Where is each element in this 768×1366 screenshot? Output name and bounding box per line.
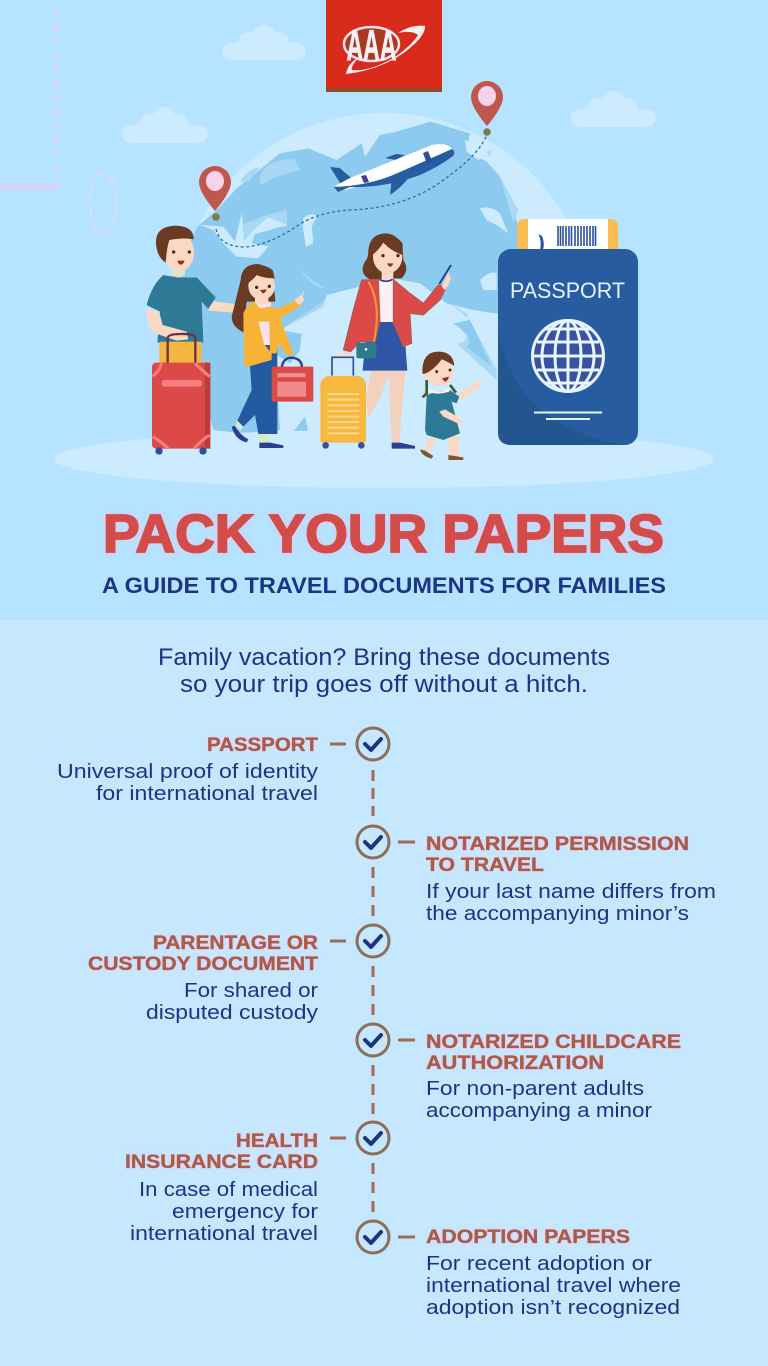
item: passport	[57, 735, 319, 805]
item: parentage or custody document: For shared or	[184, 979, 318, 1002]
icon: flight path	[216, 135, 487, 247]
man	[147, 226, 237, 364]
intro text: so your trip goes off without a hitch.	[180, 671, 588, 698]
title: PACK YOUR PAPERS	[103, 504, 664, 564]
check icons	[357, 728, 389, 1253]
icon: airplane	[330, 144, 454, 195]
item: health insurance card: international travel	[130, 1222, 318, 1245]
icon: left map pin	[199, 166, 231, 221]
intro text	[158, 644, 610, 698]
passport	[498, 249, 638, 445]
icon: cloud left	[122, 107, 208, 143]
item: notarized childcare authorization: For non-parent adults	[426, 1077, 644, 1100]
item: notarized permission to travel: the accompanying minor’s	[426, 902, 689, 925]
item: adoption papers: international travel where	[426, 1274, 681, 1297]
man's red suitcase	[152, 334, 210, 455]
item: health insurance card: In case of medical	[139, 1178, 318, 1201]
family illustration	[147, 226, 482, 460]
item: notarized permission to travel: TO TRAVEL	[426, 855, 544, 876]
yellow suitcase	[320, 357, 366, 449]
item: adoption papers: ADOPTION PAPERS	[426, 1227, 630, 1248]
item: parentage or custody document: disputed custody	[146, 1001, 319, 1024]
item: passport: for international travel	[96, 782, 318, 805]
globe	[180, 113, 566, 434]
passport label: PASSPORT	[510, 278, 625, 303]
item: health insurance card: INSURANCE CARD	[125, 1152, 318, 1173]
item: notarized permission to travel	[426, 834, 716, 925]
item: health insurance card: emergency for	[172, 1200, 318, 1223]
timeline spine	[330, 744, 415, 1237]
AAA logo: AAA	[346, 21, 396, 70]
older girl	[232, 264, 304, 448]
item: health insurance card: HEALTH	[236, 1131, 318, 1152]
item: parentage or custody document: PARENTAGE OR	[153, 933, 318, 954]
ground ellipse	[54, 430, 714, 488]
header background	[0, 0, 768, 620]
item: notarized childcare authorization: accompanying a minor	[426, 1099, 652, 1122]
mother	[337, 233, 451, 449]
item: notarized permission to travel: If your last name differs from	[426, 880, 716, 903]
item: notarized childcare authorization: NOTARIZED CHILDCARE	[426, 1032, 681, 1053]
icon: passport globe	[532, 320, 604, 392]
icon: cloud top centre	[222, 25, 306, 60]
item: adoption papers: For recent adoption or	[426, 1252, 652, 1275]
item: adoption papers	[426, 1227, 681, 1319]
red handbag	[272, 358, 313, 402]
item: parentage or custody document	[88, 933, 319, 1024]
item: passport: PASSPORT	[207, 735, 318, 756]
AAA logo	[326, 0, 442, 92]
icon: right map pin	[471, 81, 503, 136]
icon: cloud right	[571, 91, 656, 127]
item: parentage or custody document: CUSTODY DOCUMENT	[88, 954, 318, 975]
item: health insurance card	[125, 1131, 318, 1245]
item: notarized childcare authorization	[426, 1032, 681, 1122]
ticket behind passport	[517, 219, 618, 250]
item: adoption papers: adoption isn’t recognized	[426, 1296, 680, 1319]
small girl	[420, 352, 482, 460]
item: notarized permission to travel: NOTARIZED PERMISSION	[426, 834, 689, 855]
lower background	[0, 620, 768, 1366]
subtitle: A GUIDE TO TRAVEL DOCUMENTS FOR FAMILIES	[102, 573, 666, 598]
item: passport: Universal proof of identity	[57, 760, 319, 783]
item: notarized childcare authorization: AUTHORIZATION	[426, 1053, 604, 1074]
intro text: Family vacation? Bring these documents	[158, 644, 610, 671]
